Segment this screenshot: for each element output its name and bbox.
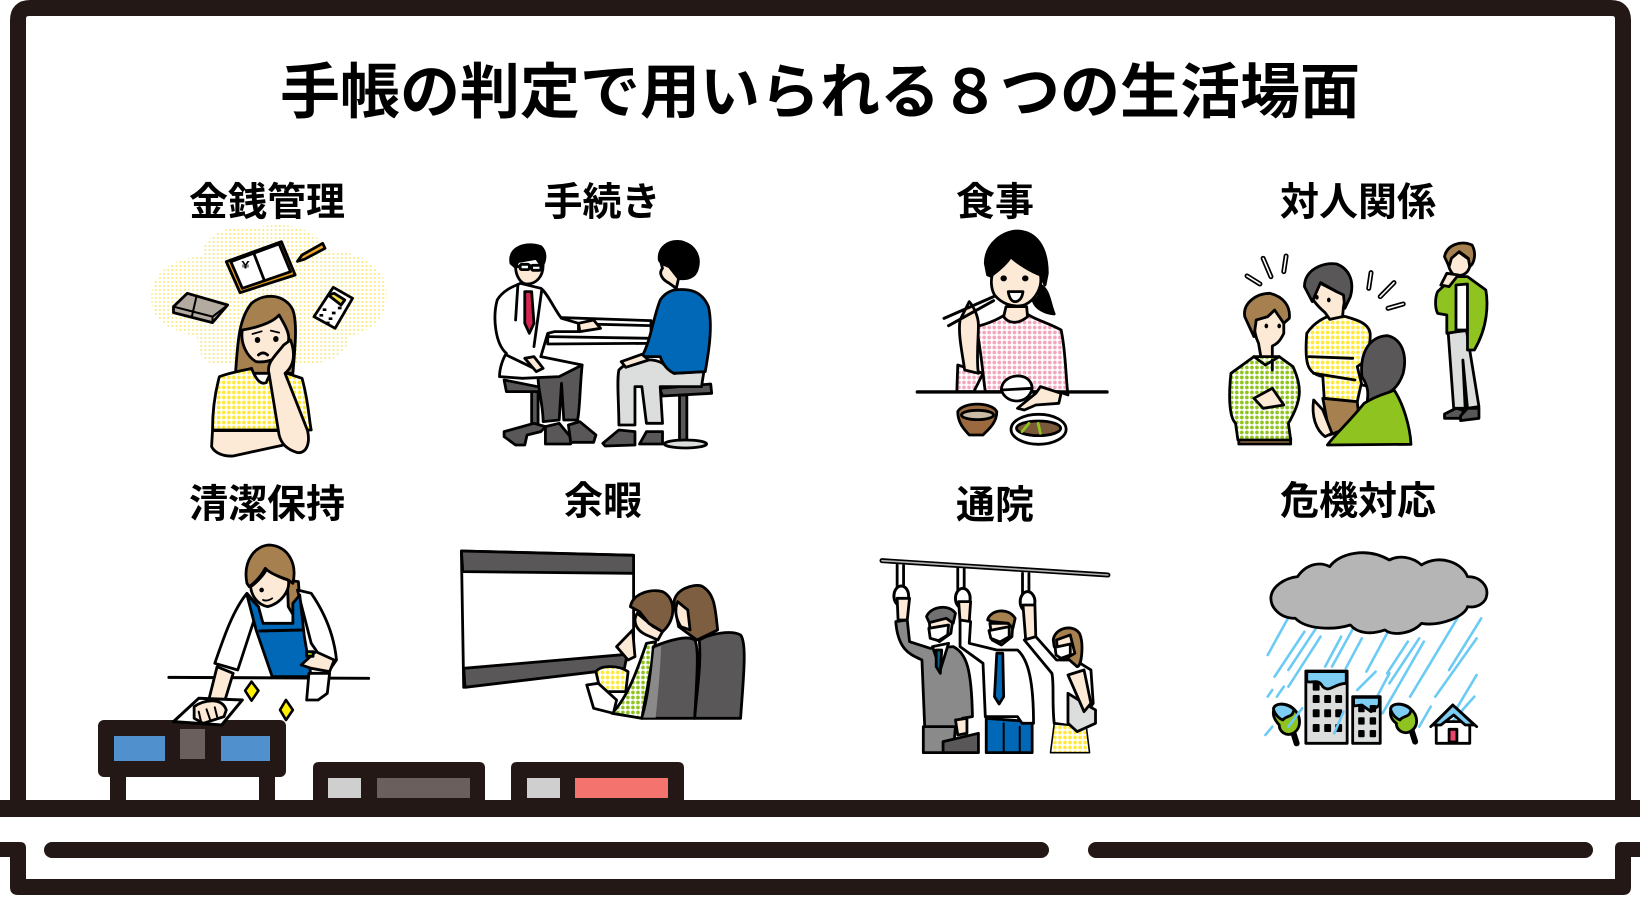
heading: hygiene: 清潔保持 [189,484,345,526]
building: middle [313,762,485,801]
illustration: eating a meal [917,231,1107,444]
building: right [511,762,684,801]
heading: relationships: 対人関係 [1280,182,1436,224]
whiteboard tray [0,842,1640,895]
heading: leisure: 余暇 [564,480,642,524]
heading: money management: 金銭管理 [189,182,345,224]
heading: procedures: 手続き [543,182,661,224]
illustration: commuter train [882,561,1108,753]
illustration: money management: ¥ [241,258,251,271]
illustration: movie theater [461,551,744,718]
heading: meals: 食事 [956,182,1034,224]
illustration: heavy rain disaster [1265,553,1487,743]
illustration: group conversation [1230,243,1487,445]
heading: hospital visits: 通院 [956,484,1034,528]
title: 手帳の判定で用いられる８つの生活場面 [280,59,1360,126]
illustration: doctor consultation [495,241,712,448]
heading: crisis response: 危機対応 [1280,480,1436,524]
wall line [0,800,1640,817]
illustration: money management [151,225,387,456]
illustration: cleaning a table [169,545,369,725]
building: left with legs [98,720,286,801]
